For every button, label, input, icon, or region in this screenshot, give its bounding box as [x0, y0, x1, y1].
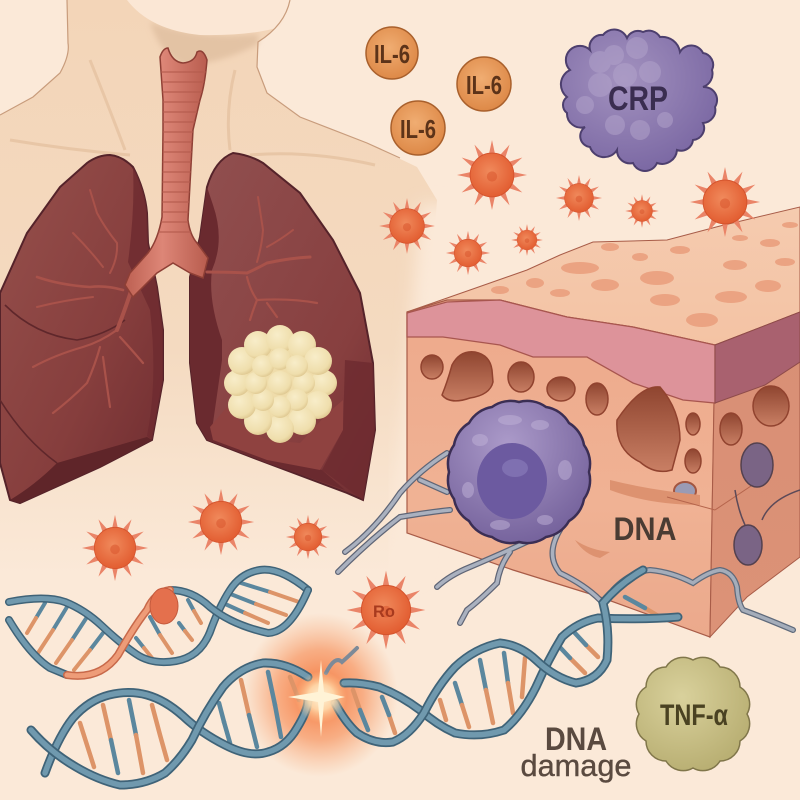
- tissue side face: [710, 312, 800, 637]
- ROS particle with label: Ro: [373, 602, 395, 621]
- left lung: [0, 155, 163, 503]
- trachea and bronchi: [125, 48, 210, 297]
- pink epithelium front: [407, 300, 715, 403]
- damage glow: [242, 613, 398, 777]
- tissue layer line: [667, 480, 760, 510]
- lower DNA helix: [31, 570, 678, 785]
- side immune cells: [734, 443, 800, 565]
- chin: [127, 0, 290, 35]
- DNA lesion blob: [150, 588, 178, 624]
- ROS particle with label: [347, 571, 425, 649]
- clavicle shading: [10, 60, 375, 165]
- left lung lower rim: [10, 437, 152, 503]
- upper DNA helix: [9, 570, 308, 676]
- right bronchial tree: [207, 197, 317, 320]
- right lung base lobe: [210, 400, 343, 470]
- cell surface mottling: [462, 415, 572, 530]
- right lung: [190, 153, 375, 500]
- right lung inner shadow: [190, 187, 345, 490]
- tissue block: [407, 207, 800, 637]
- DNA damage label: DNA: [545, 721, 607, 757]
- DNA damage label second line: damage: [520, 748, 632, 783]
- lower DNA base pairs: [80, 597, 665, 773]
- upper DNA strands: [9, 570, 308, 662]
- tissue label DNA: DNA: [614, 511, 676, 547]
- IL-6 marker top: [366, 27, 418, 79]
- cell nucleus: [477, 443, 547, 519]
- CRP surface lumps: [576, 37, 673, 140]
- IL-6 marker top: IL-6: [374, 39, 410, 69]
- shadow under chin: [150, 22, 258, 66]
- IL-6 marker lower: IL-6: [400, 114, 436, 144]
- purple immune cell: [448, 401, 590, 543]
- reactive oxygen species particles: [82, 140, 760, 581]
- tissue top face: [407, 207, 800, 345]
- small cell in tissue: [674, 482, 696, 500]
- TNF-alpha protein: TNF-α: [660, 699, 728, 732]
- tumour: [224, 325, 337, 443]
- CRP protein: [561, 29, 717, 171]
- IL-6 marker lower: [391, 101, 445, 155]
- right body fade: [400, 205, 437, 575]
- trachea rings: [158, 71, 206, 233]
- blood vessels: [421, 352, 789, 473]
- IL-6 marker right: IL-6: [466, 70, 502, 100]
- upper DNA base pairs: [27, 583, 299, 670]
- torso and neck: [0, 0, 437, 575]
- neck outline: [0, 0, 400, 158]
- lower DNA strands: [45, 692, 308, 773]
- TNF-alpha protein: [636, 657, 750, 771]
- pink epithelium side: [715, 312, 800, 403]
- broken strand fragment: [326, 648, 357, 673]
- grey damaged strand: [613, 570, 793, 630]
- immune cell processes: [338, 453, 600, 623]
- tissue surface spots: [491, 222, 798, 327]
- DNA break spark: [288, 660, 347, 737]
- right lung lower shadow: [322, 360, 375, 500]
- CRP protein: CRP: [608, 80, 668, 118]
- left lung fissure: [0, 305, 125, 463]
- tissue front face: [407, 300, 715, 637]
- IL-6 marker right: [457, 57, 511, 111]
- left lung inner shadow: [128, 167, 163, 440]
- tissue fibres: [575, 480, 700, 558]
- left bronchial tree: [33, 190, 143, 413]
